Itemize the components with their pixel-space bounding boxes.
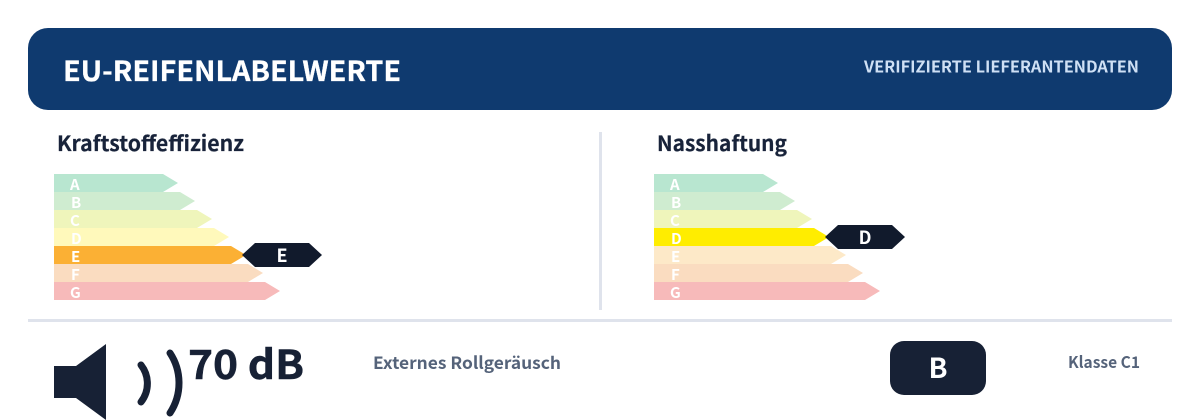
rating scale: fuel efficiency: A — [69, 174, 80, 195]
heading: Nasshaftung: Nasshaftung — [657, 128, 787, 158]
rating marker: D — [825, 224, 905, 250]
rating scale: wet grip: F — [671, 264, 680, 285]
rating scale: wet grip: E — [671, 246, 680, 267]
rating scale: wet grip: D — [671, 228, 682, 249]
rating scale: wet grip: A — [669, 174, 680, 195]
noise value: 70 dB — [188, 333, 304, 391]
rating marker: E: E — [276, 242, 288, 268]
panel: noise — [54, 333, 1140, 420]
rating marker: E — [242, 242, 322, 268]
icon: speaker — [54, 344, 179, 420]
rating scale: fuel efficiency: G — [70, 282, 81, 303]
rating scale: fuel efficiency: D — [71, 228, 82, 249]
rating scale: wet grip: B — [671, 192, 681, 213]
rating scale: wet grip — [654, 174, 880, 303]
rating scale: fuel efficiency: B — [71, 192, 81, 213]
rating scale: fuel efficiency — [54, 174, 280, 303]
header note: VERIFIZIERTE LIEFERANTENDATEN — [863, 54, 1139, 78]
noise class badge: B — [928, 347, 948, 387]
heading: Kraftstoffeffizienz: Kraftstoffeffizienz — [57, 128, 244, 158]
rating scale: fuel efficiency: E — [71, 246, 80, 267]
rating scale: fuel efficiency: C — [70, 210, 80, 231]
noise label: Externes Rollgeräusch — [373, 349, 561, 374]
title: EU-REIFENLABELWERTE — [63, 50, 401, 90]
panel: Nasshaftung — [654, 128, 905, 303]
panel: Kraftstoffeffizienz — [54, 128, 322, 303]
header banner — [28, 28, 1172, 110]
rating scale: wet grip: C — [670, 210, 680, 231]
tyre class: Klasse C1 — [1068, 349, 1140, 373]
rating marker: D: D — [859, 224, 871, 250]
noise class badge — [890, 341, 986, 395]
rating scale: wet grip: G — [670, 282, 681, 303]
rating scale: fuel efficiency: F — [71, 264, 80, 285]
